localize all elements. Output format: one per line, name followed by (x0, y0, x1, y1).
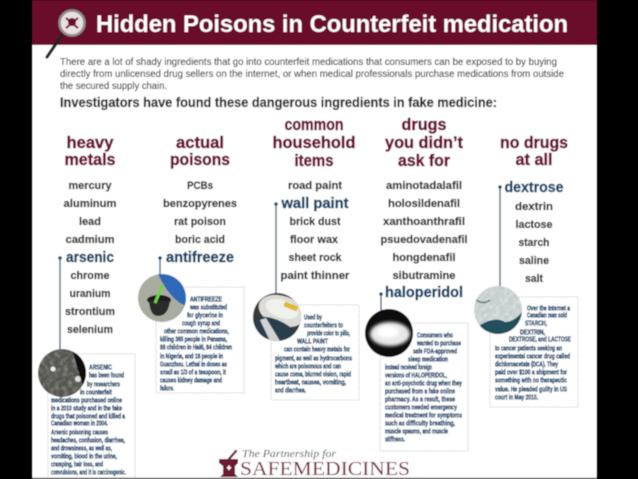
column: no drugs at all (500, 134, 568, 285)
column: drugs you didn't ask for: drugs (402, 116, 446, 134)
callout: wall paint: provide color to pills, (307, 330, 350, 338)
callout: arsenic: medications purchased online (51, 398, 122, 404)
callout: haloperidol: wanted to purchase (416, 340, 461, 348)
column: common household items: wall paint (280, 196, 349, 212)
column: heavy metals: selenium (67, 324, 113, 336)
column: drugs you didn't ask for: xanthoanthrafil (383, 216, 465, 228)
column: no drugs at all: no drugs (500, 134, 568, 152)
callout: antifreeze: cough syrup and (182, 320, 220, 328)
column: heavy metals: lead (79, 216, 101, 228)
column: heavy metals: aluminum (64, 198, 117, 210)
callout: arsenic: convulsions, and it is carcinogenic. (51, 470, 126, 476)
callout: wall paint (253, 202, 359, 400)
column: drugs you didn't ask for (380, 116, 468, 301)
callout: arsenic (38, 256, 135, 478)
column: common household items: floor wax (290, 234, 339, 246)
column: common household items: paint thinner (280, 270, 350, 282)
column: no drugs at all: lactose (516, 219, 552, 231)
callout: wall paint: WALL PAINT (297, 338, 329, 346)
callout: dextrose: Over the Internet a (527, 306, 570, 312)
subheading: Investigators have found these dangerous ingredients in fake medicine: (60, 95, 497, 110)
callout: haloperidol: sleep medication (408, 356, 448, 364)
column: actual poisons: benzopyrenes (163, 198, 237, 210)
column: heavy metals (64, 134, 117, 336)
column: common household items: brick dust (290, 216, 341, 228)
column: drugs you didn't ask for: haloperidol (385, 285, 463, 301)
intro text: directly from unlicensed drug sellers on the internet, or when medical professionals purchase medications from outside (60, 69, 564, 80)
callout: arsenic: Canadian woman in 2004. (51, 420, 108, 428)
callout: dextrose: paid over $100 a shipment for (495, 370, 567, 376)
callout: dextrose: court in May 2010. (495, 394, 538, 402)
column: no drugs at all: saline (519, 255, 549, 267)
callout: arsenic: in counterfeit (80, 390, 112, 396)
column: no drugs at all: dextrose (504, 180, 564, 196)
callout: dextrose: dichloroacetate (DCA). They (495, 362, 558, 368)
callout: antifreeze: for glycerine in (187, 312, 223, 320)
column: drugs you didn't ask for: sibutramine (392, 270, 456, 282)
callout: wall paint: counterfeiters to (304, 322, 343, 330)
column: no drugs at all: salt (525, 273, 543, 285)
column: common household items: sheet rock (288, 252, 342, 264)
column: drugs you didn't ask for: hongdenafil (392, 252, 456, 264)
column: heavy metals: metals (64, 151, 116, 169)
column: heavy metals: chrome (70, 270, 110, 282)
column: heavy metals: uranium (70, 288, 111, 300)
column: heavy metals: mercury (68, 180, 112, 192)
callout: arsenic: by researchers (87, 382, 120, 388)
column: heavy metals: cadmium (66, 234, 115, 246)
callout: haloperidol: customers needed emergency (385, 404, 457, 412)
callout: haloperidol: instead received foreign (385, 364, 432, 372)
column: actual poisons: poisons (170, 151, 230, 169)
callout: dextrose: Canadian man sold (527, 312, 567, 320)
callout: dextrose: DEXTROSE, and LACTOSE (509, 336, 571, 344)
column: heavy metals: heavy (66, 134, 114, 152)
callout: dextrose: STARCH, (525, 320, 547, 328)
callout: antifreeze: in Nigeria, and 18 people in (160, 354, 223, 360)
bottom rule (32, 478, 597, 479)
callout: haloperidol: stiffness. (385, 436, 405, 444)
column: actual poisons: boric acid (175, 234, 225, 246)
callout: haloperidol: Consumers who (417, 332, 453, 340)
callout: arsenic: and drowsiness, as well as, (51, 446, 112, 452)
callout: antifreeze: 88 children in Haiti, 84 children (160, 344, 232, 352)
callout: haloperidol: such as difficulty breathing, (385, 420, 455, 428)
column: drugs you didn't ask for: aminotadalafil (386, 180, 462, 192)
column: actual poisons (163, 134, 237, 266)
footer logo: The Partnership for Safe Medicines: The Partnership for (242, 449, 337, 460)
callout: wall paint: cause coma, blurred vision, rapid (275, 372, 351, 378)
callout: haloperidol: versions of HALOPERIDOL, (385, 372, 447, 380)
column: actual poisons: rat poison (174, 216, 226, 228)
callout: antifreeze: failure. (160, 386, 174, 392)
callout: arsenic: vomiting, blood in the urine, (51, 454, 117, 460)
column: heavy metals: arsenic (66, 250, 114, 266)
callout: dextrose: value. He pleaded guilty in US (495, 386, 567, 394)
icon: magnifying glass with skull (47, 10, 84, 57)
callout: wall paint: which are poisonous and can (274, 364, 341, 370)
callout: arsenic: in a 2010 study and in the fake (51, 406, 122, 412)
column: common household items: items (294, 152, 334, 170)
callout: haloperidol: muscle spasms, and muscle (385, 428, 448, 436)
callout: antifreeze (138, 256, 244, 393)
callout: antifreeze: killing 365 people in Panama, (160, 336, 227, 344)
column: drugs you didn't ask for: you didn’t (385, 134, 463, 152)
callout: arsenic: cramping, hair loss, and (51, 462, 103, 468)
intro text: There are a lot of shady ingredients that go into counterfeit medications that consumers can be exposed to by buying (60, 57, 557, 68)
column: no drugs at all: at all (516, 151, 552, 169)
intro text: the secured supply chain. (60, 81, 167, 92)
callout: antifreeze: other common medications, (164, 328, 229, 336)
callout: wall paint: can contain heavy metals for (284, 346, 350, 354)
callout: arsenic: has been found (89, 372, 124, 380)
callout: antifreeze: Guanzhou. Lethal in doses as (160, 362, 227, 368)
callout: antifreeze: small as 1/3 of a teaspoon, it (160, 370, 226, 376)
callout: arsenic: Arsenic poisoning causes (51, 430, 108, 436)
callout: dextrose: DEXTRIN, (520, 330, 545, 336)
column: heavy metals: strontium (65, 306, 115, 318)
footer logo: The Partnership for Safe Medicines (219, 449, 410, 479)
title: Hidden Poisons in Counterfeit medication (96, 11, 568, 38)
callout: dextrose: to cancer patients seeking an (495, 346, 562, 352)
callout: arsenic: headaches, confusion, diarrhea, (51, 438, 125, 444)
column: actual poisons: antifreeze (166, 250, 234, 266)
column: no drugs at all: starch (518, 237, 550, 249)
intro text (60, 57, 564, 92)
callout: antifreeze: causes kidney damage and (160, 378, 222, 384)
column: drugs you didn't ask for: ask for (398, 152, 451, 170)
callout: antifreeze: was substituted (189, 304, 227, 312)
callout: dextrose: experimental cancer drug called (495, 354, 570, 360)
column: common household items: road paint (288, 180, 342, 192)
callout: wall paint: heartbeat, nausea, vomiting, (275, 380, 346, 386)
column: drugs you didn't ask for: psuedovadenafil (380, 234, 468, 246)
callout: haloperidol: pharmacy. As a result, these (385, 396, 455, 404)
callout: antifreeze: ANTIFREEZE (190, 296, 222, 304)
column: actual poisons: actual (176, 134, 224, 152)
callout: haloperidol (365, 292, 468, 451)
callout: haloperidol: safe FDA-approved (413, 348, 457, 356)
callout: arsenic: drugs that poisoned and killed a (51, 414, 125, 420)
callout: dextrose (474, 185, 578, 407)
header band (32, 0, 597, 45)
callout: wall paint: pigment, as well as hydrocarbons (275, 356, 352, 362)
callout: wall paint: Used by (304, 314, 322, 322)
column: common household items (272, 116, 356, 282)
callout: arsenic: ARSENIC (89, 364, 112, 372)
column: no drugs at all: dextrin (515, 201, 553, 213)
callout: haloperidol: an anti-psychotic drug when they (385, 380, 462, 388)
callout: haloperidol: medical treatment for symptoms (385, 412, 462, 420)
column: actual poisons: PCBs (187, 180, 213, 192)
callout: dextrose: something with no therapeutic (495, 378, 567, 384)
column: drugs you didn't ask for: holosildenafil (388, 198, 460, 210)
callout: haloperidol: purchased from a fake online (385, 388, 455, 396)
column: common household items: common (284, 116, 344, 134)
callout: wall paint: and diarrhea. (275, 388, 306, 394)
column: common household items: household (272, 134, 356, 152)
